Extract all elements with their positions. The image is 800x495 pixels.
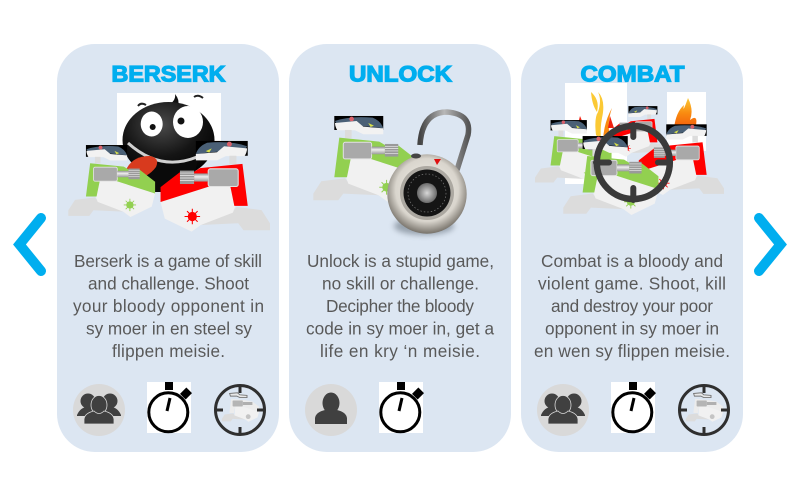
panel: combat <box>521 44 743 452</box>
description: unlock: no skill or challenge. <box>322 274 479 294</box>
illustration: turrets, flames and crosshair <box>535 83 724 215</box>
navigation arrow: next <box>759 218 780 271</box>
icon: stopwatch <box>147 382 192 433</box>
icon: multiplayer group <box>73 384 125 436</box>
description: combat: en wen sy flippen meisie. <box>534 341 730 361</box>
description: combat: and destroy your poor <box>551 296 713 316</box>
description: berserk <box>73 251 264 361</box>
description: berserk: flippen meisie. <box>112 341 225 361</box>
illustration: bomb character with two turrets <box>68 93 270 232</box>
navigation arrow: previous <box>20 218 41 271</box>
description: unlock: Unlock is a stupid game, <box>307 251 494 271</box>
description: unlock <box>306 251 494 361</box>
description: combat: Combat is a bloody and <box>541 251 723 271</box>
icon: multiplayer group <box>537 384 589 436</box>
panel: berserk <box>57 44 279 452</box>
description: unlock: life en kry ‘n meisie. <box>320 341 480 361</box>
heading: berserk: BERSERK <box>112 62 226 86</box>
panel: unlock <box>289 44 511 452</box>
description: unlock: code in sy moer in, get a <box>306 318 494 338</box>
description: combat <box>534 251 730 361</box>
heading: unlock: UNLOCK <box>349 62 452 86</box>
illustration: turret with open padlock <box>313 112 469 235</box>
description: berserk: and challenge. Shoot <box>88 274 249 294</box>
description: unlock: Decipher the bloody <box>326 296 474 316</box>
description: combat: violent game. Shoot, kill <box>538 274 726 294</box>
icon: turret crosshair <box>215 385 265 435</box>
description: berserk: Berserk is a game of skill <box>74 251 262 271</box>
icon: turret crosshair <box>679 385 729 435</box>
description: berserk: your bloody opponent in <box>73 296 264 316</box>
icon: single player <box>305 384 357 436</box>
icon: stopwatch <box>611 382 656 433</box>
heading: combat: COMBAT <box>580 62 685 86</box>
description: berserk: sy moer in en steel sy <box>86 318 252 338</box>
icon: stopwatch <box>379 382 424 433</box>
description: combat: opponent in sy moer in <box>545 318 719 338</box>
